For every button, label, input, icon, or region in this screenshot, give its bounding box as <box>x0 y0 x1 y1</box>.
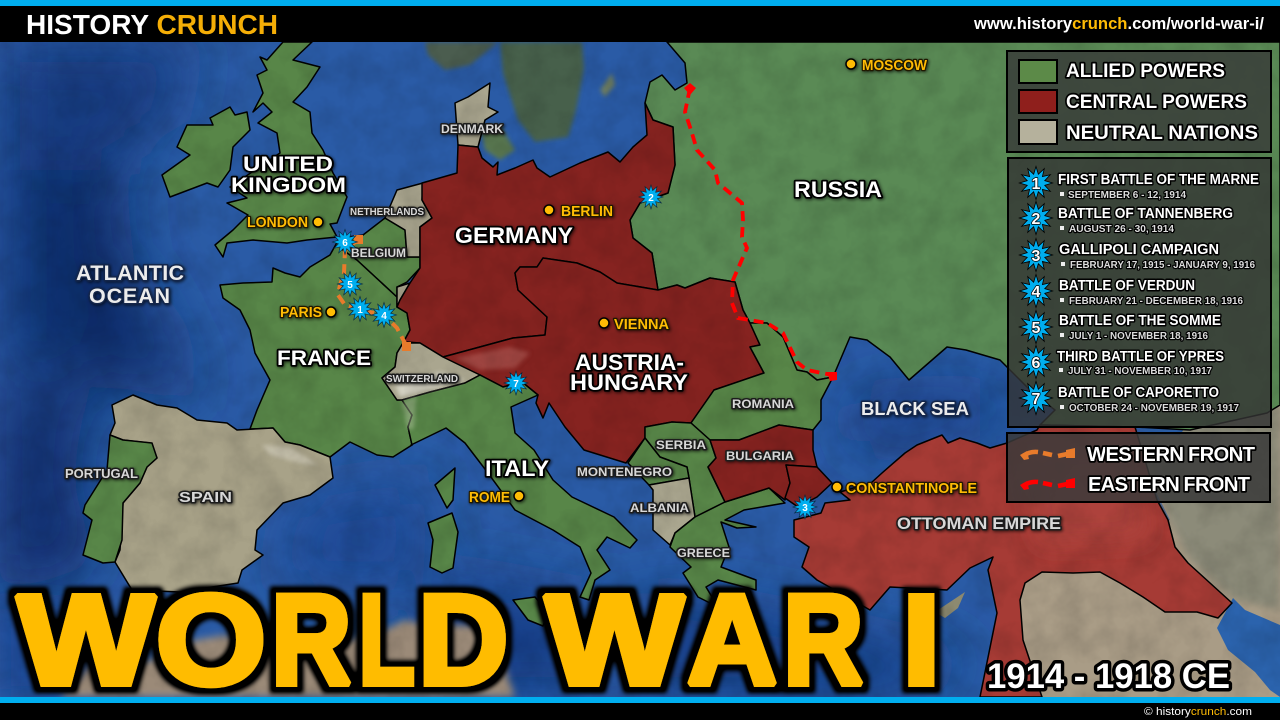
label: Austria-Hungary <box>570 350 688 395</box>
battle 5: JULY 1 - NOVEMBER 18, 1916 <box>1069 331 1208 342</box>
battle 3: FEBRUARY 17, 1915 - JANUARY 9, 1916 <box>1070 260 1255 271</box>
marker 6: Ypres <box>332 230 358 254</box>
battle 4: 4 <box>1032 284 1041 301</box>
title: World War I: W <box>545 569 684 712</box>
Greece <box>670 488 785 607</box>
label: Atlantic Ocean: ATLANTIC <box>76 261 184 285</box>
site url: www.historycrunch.com/world-war-i/ <box>973 14 1264 33</box>
marker 2: Tannenberg <box>639 185 663 209</box>
battle 5: 5 <box>1032 320 1041 337</box>
panel: battles list <box>1008 158 1271 427</box>
panel: fronts legend <box>1007 433 1270 502</box>
swatch: Central Powers: CENTRAL POWERS <box>1066 91 1247 113</box>
marker 5: Somme <box>338 272 362 296</box>
date range: 1914 - 1918 CE <box>987 657 1230 696</box>
label: Bulgaria: BULGARIA <box>726 451 794 463</box>
France <box>220 237 412 457</box>
battle 6: THIRD BATTLE OF YPRES <box>1057 349 1224 365</box>
city: Rome: ROME <box>469 489 510 506</box>
label: Belgium: BELGIUM <box>351 248 406 260</box>
Austria-Hungary <box>440 258 764 463</box>
battle 4 <box>1020 274 1243 308</box>
label: Russia: RUSSIA <box>794 177 882 202</box>
battle 6: 6 <box>1032 355 1041 372</box>
battle 3: GALLIPOLI CAMPAIGN <box>1059 242 1219 258</box>
swatch: Neutral Nations: NEUTRAL NATIONS <box>1066 122 1258 144</box>
header bar <box>0 0 1280 42</box>
label: Black Sea: BLACK SEA <box>861 398 969 419</box>
marker 7: Caporetto: 7 <box>513 379 519 390</box>
city: Paris: PARIS <box>280 304 322 321</box>
label: United Kingdom: KINGDOM <box>231 173 346 197</box>
label: Montenegro: MONTENEGRO <box>577 467 672 479</box>
city: Constantinople: CONSTANTINOPLE <box>846 480 977 497</box>
label: Ottoman Empire: OTTOMAN EMPIRE <box>897 514 1061 533</box>
Denmark <box>455 83 498 147</box>
Serbia <box>645 422 725 517</box>
label: United Kingdom <box>231 152 346 197</box>
battle 7: OCTOBER 24 - NOVEMBER 19, 1917 <box>1069 403 1239 414</box>
label: Switzerland: SWITZERLAND <box>386 374 458 385</box>
label: Spain: SPAIN <box>179 489 232 506</box>
city: Vienna: VIENNA <box>614 316 669 333</box>
battle 1: FIRST BATTLE OF THE MARNE <box>1058 172 1259 188</box>
Cyprus <box>935 592 965 618</box>
marker 1: Marne: 1 <box>357 305 363 316</box>
legend: Eastern Front: EASTERN FRONT <box>1088 473 1250 496</box>
Germany <box>397 103 675 357</box>
title: World War I: D <box>418 569 508 712</box>
label: Portugal: PORTUGAL <box>65 466 138 481</box>
country and city labels <box>65 57 1061 560</box>
Ottoman Empire <box>794 425 1232 697</box>
title: World War I: W <box>17 569 155 712</box>
Ottoman Europe <box>785 465 832 507</box>
Caspian Sea <box>1125 268 1190 435</box>
Belgium <box>340 218 420 297</box>
label: Austria-Hungary: HUNGARY <box>570 370 688 395</box>
battle 4: FEBRUARY 21 - DECEMBER 18, 1916 <box>1069 296 1243 307</box>
label: Italy: ITALY <box>485 456 549 481</box>
battle 3: 3 <box>1032 248 1041 265</box>
battle 2 <box>1020 202 1233 235</box>
logo: HISTORY CRUNCH <box>26 9 278 40</box>
Montenegro <box>628 438 689 485</box>
label: Serbia: SERBIA <box>656 440 706 452</box>
Persian Gulf <box>1217 598 1280 697</box>
marker 3: Gallipoli: 3 <box>802 503 808 514</box>
Romania <box>691 323 833 440</box>
Persia and Arabia <box>1020 405 1280 697</box>
United Kingdom <box>215 42 347 257</box>
battle 2: BATTLE OF TANNENBERG <box>1058 206 1233 222</box>
Corsica <box>435 468 455 508</box>
title: World War I: L <box>358 569 415 712</box>
battle 3 <box>1020 238 1255 272</box>
swatch: Allied Powers: ALLIED POWERS <box>1066 60 1225 82</box>
Albania <box>649 478 695 545</box>
arrow: Eastern Front line <box>684 83 837 381</box>
marker 3: Gallipoli <box>793 495 817 519</box>
battle 7: BATTLE OF CAPORETTO <box>1058 385 1219 401</box>
footer bar <box>0 697 1280 720</box>
title: World War I: O <box>156 569 266 712</box>
label: Netherlands: NETHERLANDS <box>350 207 424 218</box>
marker 7: Caporetto <box>504 371 528 395</box>
battle 5: BATTLE OF THE SOMME <box>1059 313 1221 329</box>
panel: power legend <box>1007 51 1271 152</box>
label: Denmark: DENMARK <box>441 124 504 136</box>
arrow: Western Front line <box>338 235 411 351</box>
title: World War I: R <box>783 569 863 712</box>
battle 1: SEPTEMBER 6 - 12, 1914 <box>1068 190 1186 201</box>
battle 7: 7 <box>1032 391 1041 408</box>
Sardinia <box>428 513 458 573</box>
battle 6 <box>1020 346 1224 378</box>
Luxembourg <box>397 283 410 307</box>
marker 1: Marne <box>348 296 372 322</box>
label: Atlantic Ocean <box>76 261 184 308</box>
North Africa <box>60 620 515 697</box>
Ireland <box>162 107 250 197</box>
battle 2: AUGUST 26 - 30, 1914 <box>1069 224 1174 235</box>
marker 6: Ypres: 6 <box>342 238 348 249</box>
label: Albania: ALBANIA <box>630 503 689 515</box>
label: Romania: ROMANIA <box>732 399 794 411</box>
title: World War I <box>17 569 940 712</box>
Switzerland <box>382 343 480 400</box>
city: Moscow: MOSCOW <box>862 57 928 74</box>
label: France: FRANCE <box>277 346 371 370</box>
map: mountain highlights <box>262 347 1150 545</box>
battle markers on map <box>332 185 817 519</box>
battle 5 <box>1020 310 1221 344</box>
Sicily <box>513 597 548 626</box>
Portugal <box>83 435 157 563</box>
marker 4: Verdun <box>372 302 396 328</box>
battle 4: BATTLE OF VERDUN <box>1059 278 1195 294</box>
battle 2: 2 <box>1032 211 1041 228</box>
label: United Kingdom: UNITED <box>243 152 333 176</box>
battle 6: JULY 31 - NOVEMBER 10, 1917 <box>1068 366 1212 377</box>
Netherlands <box>385 183 432 257</box>
city: Berlin: BERLIN <box>561 203 613 220</box>
battle 1: 1 <box>1032 176 1041 193</box>
title: World War I: I <box>902 569 940 712</box>
Russia <box>630 42 1280 430</box>
marker 4: Verdun: 4 <box>381 311 387 322</box>
copyright: © history crunch.com <box>1144 706 1252 718</box>
Scandinavia <box>425 42 615 160</box>
label: Greece: GREECE <box>677 548 730 560</box>
Bulgaria <box>708 425 817 502</box>
battle 1 <box>1020 166 1259 201</box>
title: World War I: A <box>687 569 777 712</box>
label: Germany: GERMANY <box>455 223 573 248</box>
label: Austria-Hungary: AUSTRIA- <box>575 350 684 375</box>
Italy <box>402 375 637 600</box>
legend: Western Front: WESTERN FRONT <box>1087 443 1255 466</box>
marker 5: Somme: 5 <box>347 280 353 291</box>
label: Atlantic Ocean: OCEAN <box>89 284 170 308</box>
title: World War I: R <box>271 569 351 712</box>
city: London: LONDON <box>247 214 308 231</box>
Spain <box>110 395 333 592</box>
battle 7 <box>1020 382 1239 414</box>
marker 2: Tannenberg: 2 <box>648 193 654 204</box>
